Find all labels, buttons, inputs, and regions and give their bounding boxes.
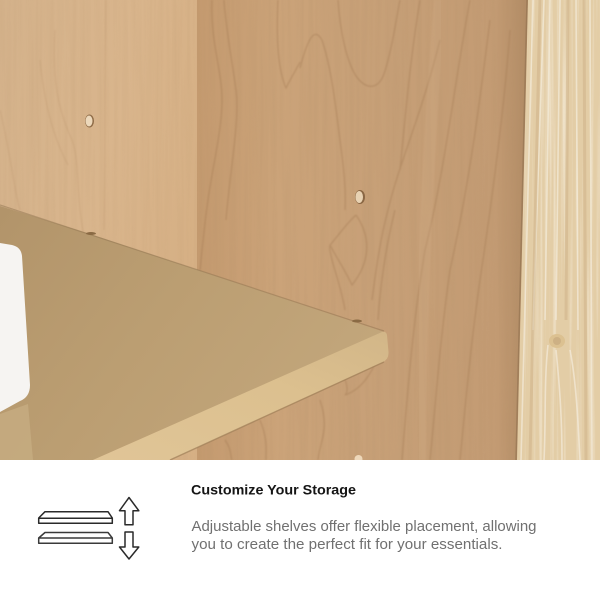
- icon: lower shelf: [39, 532, 112, 543]
- icon: upper shelf: [39, 512, 112, 523]
- peg under shelf, right: [352, 320, 362, 322]
- icon: peg hole upper centre: [355, 190, 365, 204]
- peg under shelf, left: [86, 232, 96, 235]
- icon: peg hole lower centre: [354, 455, 362, 460]
- panel: shelf: [0, 205, 389, 460]
- product photo: shelf inside wood cabinet: [0, 0, 600, 463]
- shelf back shadow: [0, 205, 384, 331]
- icon: adjustable shelves with up and down arrows: [39, 498, 139, 559]
- reflection on shelf: [0, 404, 33, 460]
- panel: right vertical post: [515, 0, 600, 460]
- text block: description: [192, 519, 536, 553]
- description line 2: you to create the perfect fit for your essentials.: [192, 537, 502, 553]
- panel: left back wall: [0, 0, 199, 460]
- shelf edge underside shadow: [170, 362, 384, 460]
- shelf top surface: [0, 206, 384, 460]
- wood grain figure lines: [200, 0, 510, 460]
- post shadow line: [516, 0, 527, 460]
- heading: Customize Your Storage: Customize Your Storage: [191, 482, 356, 498]
- shelf front edge: [93, 332, 389, 460]
- panel: centre back wall: [197, 0, 529, 460]
- description line 1: Adjustable shelves offer flexible placement, allowing: [192, 519, 536, 535]
- icon: down arrow: [120, 532, 139, 559]
- icon: up arrow: [120, 498, 139, 525]
- white object on shelf: [0, 243, 30, 412]
- icon: peg hole upper left: [85, 114, 94, 128]
- knot in post: [549, 334, 565, 348]
